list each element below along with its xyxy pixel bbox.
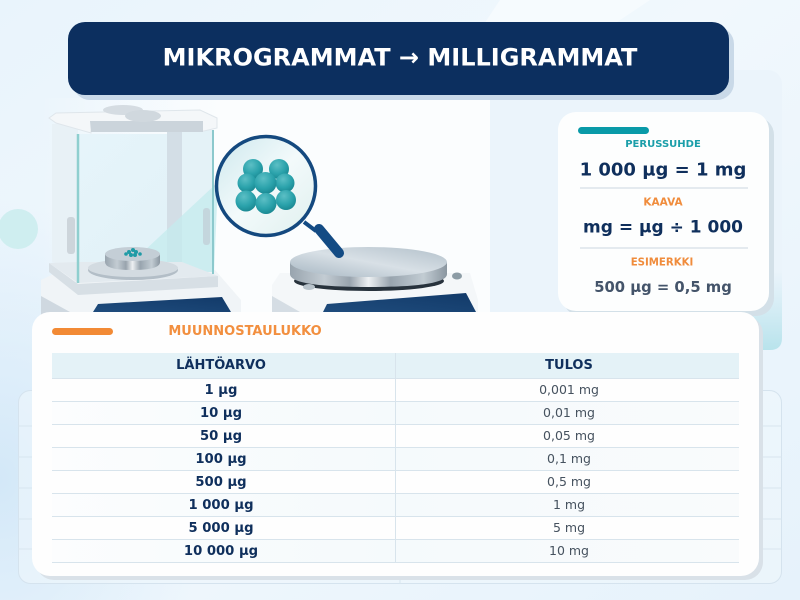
label: perussuhde: PERUSSUHDE bbox=[625, 139, 701, 150]
example: 500 µg = 0,5 mg bbox=[594, 279, 732, 296]
source values column bbox=[184, 383, 258, 559]
table grid lines bbox=[52, 353, 739, 562]
source values column: 500 µg bbox=[195, 475, 247, 490]
base relation: 1 000 µg = 1 mg bbox=[580, 160, 746, 180]
source values column: 50 µg bbox=[200, 429, 242, 444]
source values column: 5 000 µg bbox=[188, 521, 254, 536]
teal accent bar bbox=[578, 127, 649, 134]
title banner bbox=[68, 22, 734, 100]
source values column: 1 µg bbox=[205, 383, 237, 398]
result values column: 0,1 mg bbox=[547, 451, 591, 466]
result values column: 1 mg bbox=[553, 497, 585, 512]
source values column: 100 µg bbox=[195, 452, 247, 467]
illustration: second balance with steel plate bbox=[272, 247, 478, 326]
result values column: 0,01 mg bbox=[543, 405, 595, 420]
label: kaava: KAAVA bbox=[643, 196, 683, 208]
title banner: MIKROGRAMMAT → MILLIGRAMMAT bbox=[163, 44, 638, 72]
result values column: 0,001 mg bbox=[539, 382, 599, 397]
table header row: LÄHTÖARVO bbox=[176, 357, 266, 373]
table header row bbox=[52, 353, 739, 378]
table heading: MUUNNOSTAULUKKO bbox=[168, 324, 322, 339]
result values column bbox=[539, 382, 599, 558]
illustration: analytical balance with glass cabinet bbox=[41, 105, 241, 330]
panel: formula card bbox=[558, 112, 774, 316]
alternating row fills bbox=[52, 402, 739, 562]
orange accent bar bbox=[52, 328, 113, 335]
result values column: 0,05 mg bbox=[543, 428, 595, 443]
result values column: 0,5 mg bbox=[547, 474, 591, 489]
table header row: TULOS bbox=[545, 358, 593, 373]
icon: magnifying glass with beads bbox=[216, 136, 339, 253]
result values column: 5 mg bbox=[553, 520, 585, 535]
source values column: 10 000 µg bbox=[184, 544, 258, 559]
label: esimerkki: ESIMERKKI bbox=[631, 258, 693, 268]
formula: mg = µg ÷ 1 000 bbox=[583, 218, 743, 238]
source values column: 1 000 µg bbox=[188, 498, 254, 513]
source values column: 10 µg bbox=[200, 406, 242, 421]
result values column: 10 mg bbox=[549, 543, 589, 558]
panel: conversion table bbox=[32, 312, 763, 580]
background table outline bbox=[18, 390, 782, 584]
